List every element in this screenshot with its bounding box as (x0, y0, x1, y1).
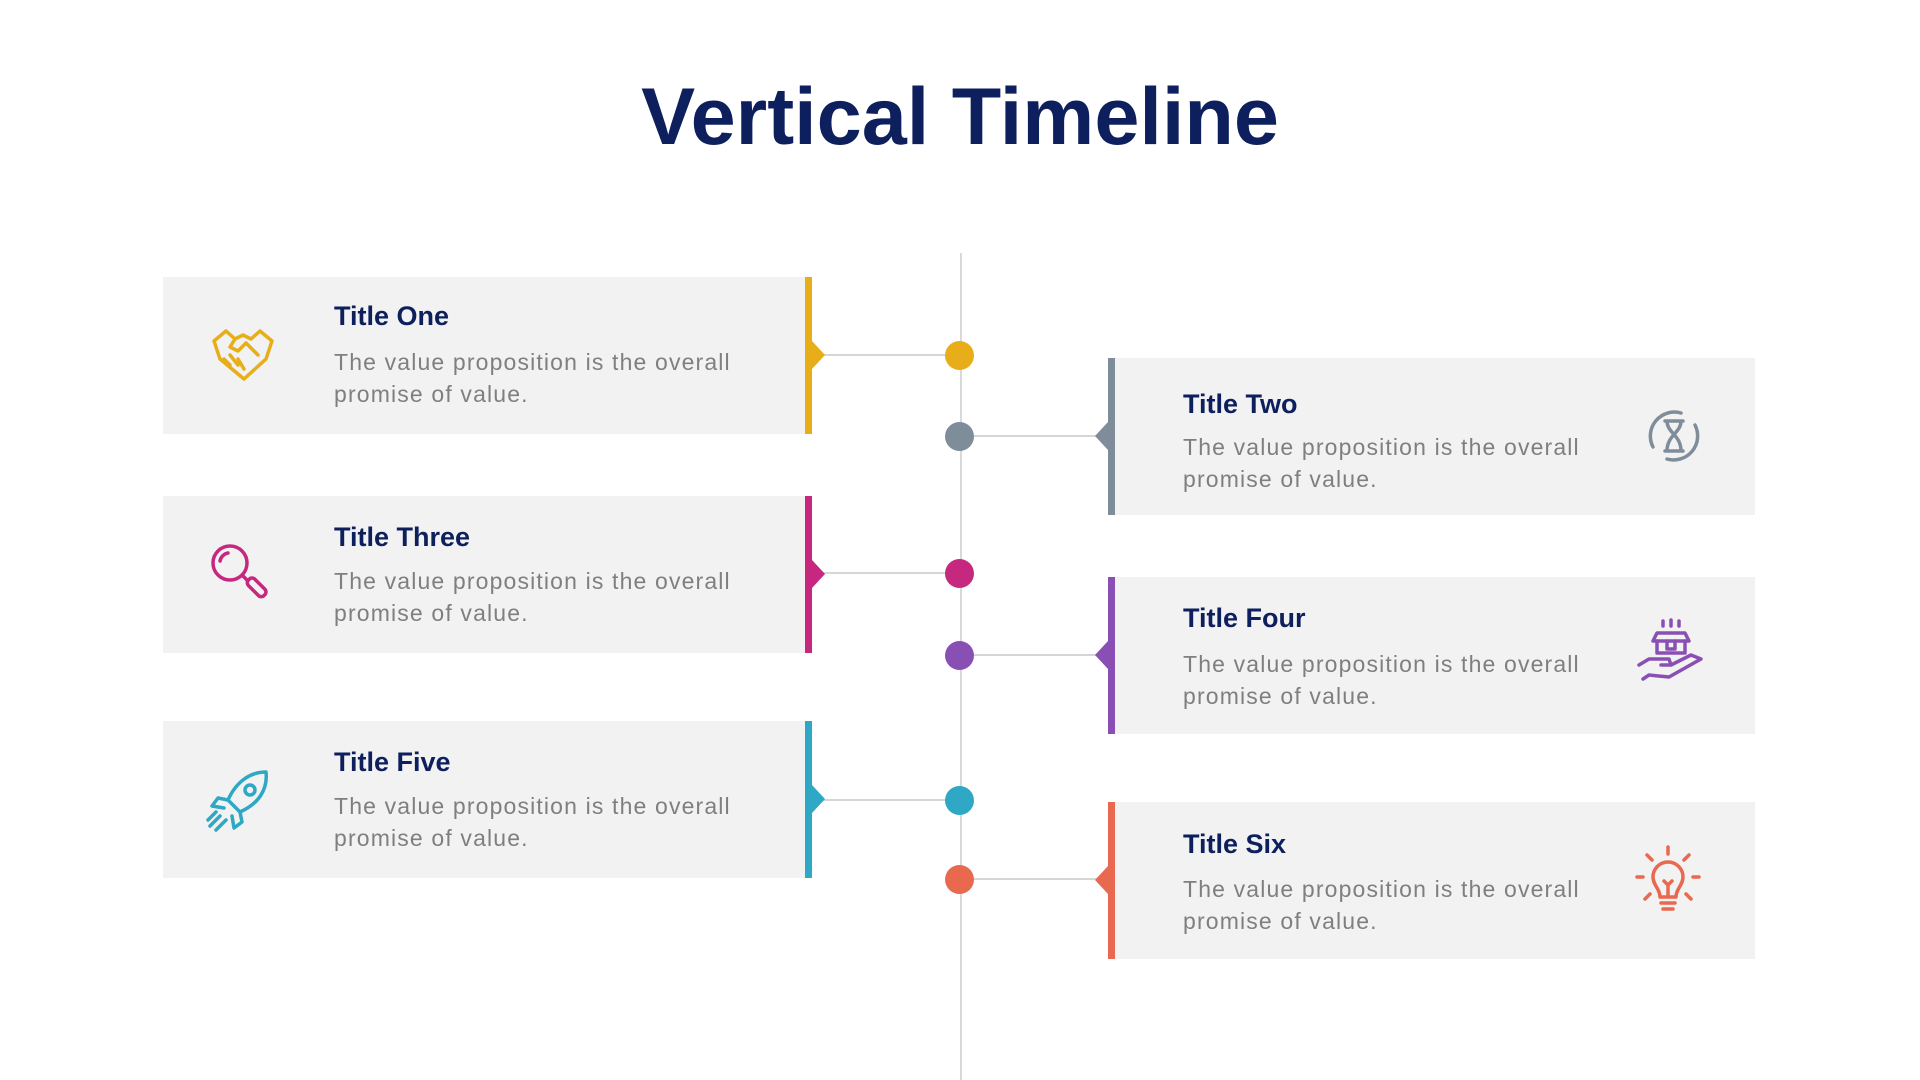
panel: Title Six: promise of value. (1183, 908, 1378, 934)
center timeline line (960, 253, 962, 1080)
panel: Title Six (1113, 802, 1755, 959)
panel: Title Four (1113, 577, 1755, 734)
panel: Title Two (1113, 358, 1755, 515)
dot 3 (945, 559, 974, 588)
panel: Title Three: The value proposition is the overall (334, 568, 731, 594)
panel: Title Five (163, 721, 805, 878)
text: Title One: Title One (334, 301, 449, 331)
panel: Title Five: The value proposition is the overall (334, 793, 731, 819)
dot 6 (945, 865, 974, 894)
panel: Title Four: The value proposition is the overall (1183, 651, 1580, 677)
title: Vertical Timeline (641, 72, 1279, 162)
connector lines (811, 354, 961, 356)
panel: Title One: promise of value. (334, 381, 529, 407)
dot 2 (945, 422, 974, 451)
icon: handshake (212, 329, 274, 381)
panel: Title Four: promise of value. (1183, 683, 1378, 709)
dot 5 (945, 786, 974, 815)
text: Title Two: Title Two (1183, 389, 1298, 419)
panel: Title One: The value proposition is the overall (334, 349, 731, 375)
dot 4 (945, 641, 974, 670)
panel: Title Six: The value proposition is the overall (1183, 876, 1580, 902)
icon: light bulb (1635, 845, 1701, 911)
dot 1 (945, 341, 974, 370)
icon: rocket (206, 770, 268, 832)
panel: Title Three (163, 496, 805, 653)
icon: hand with box (1637, 618, 1703, 681)
panel: Title Two: promise of value. (1183, 466, 1378, 492)
text: Title Three: Title Three (334, 522, 470, 552)
icon: hourglass cycle (1648, 410, 1700, 462)
panel: Title Two: The value proposition is the overall (1183, 434, 1580, 460)
text: Title Six: Title Six (1183, 829, 1286, 859)
panel: Title One (163, 277, 805, 434)
panel: Title Three: promise of value. (334, 600, 529, 626)
icon: magnifier (211, 544, 268, 598)
text: Title Four: Title Four (1183, 603, 1306, 633)
text: Title Five: Title Five (334, 747, 451, 777)
panel: Title Five: promise of value. (334, 825, 529, 851)
